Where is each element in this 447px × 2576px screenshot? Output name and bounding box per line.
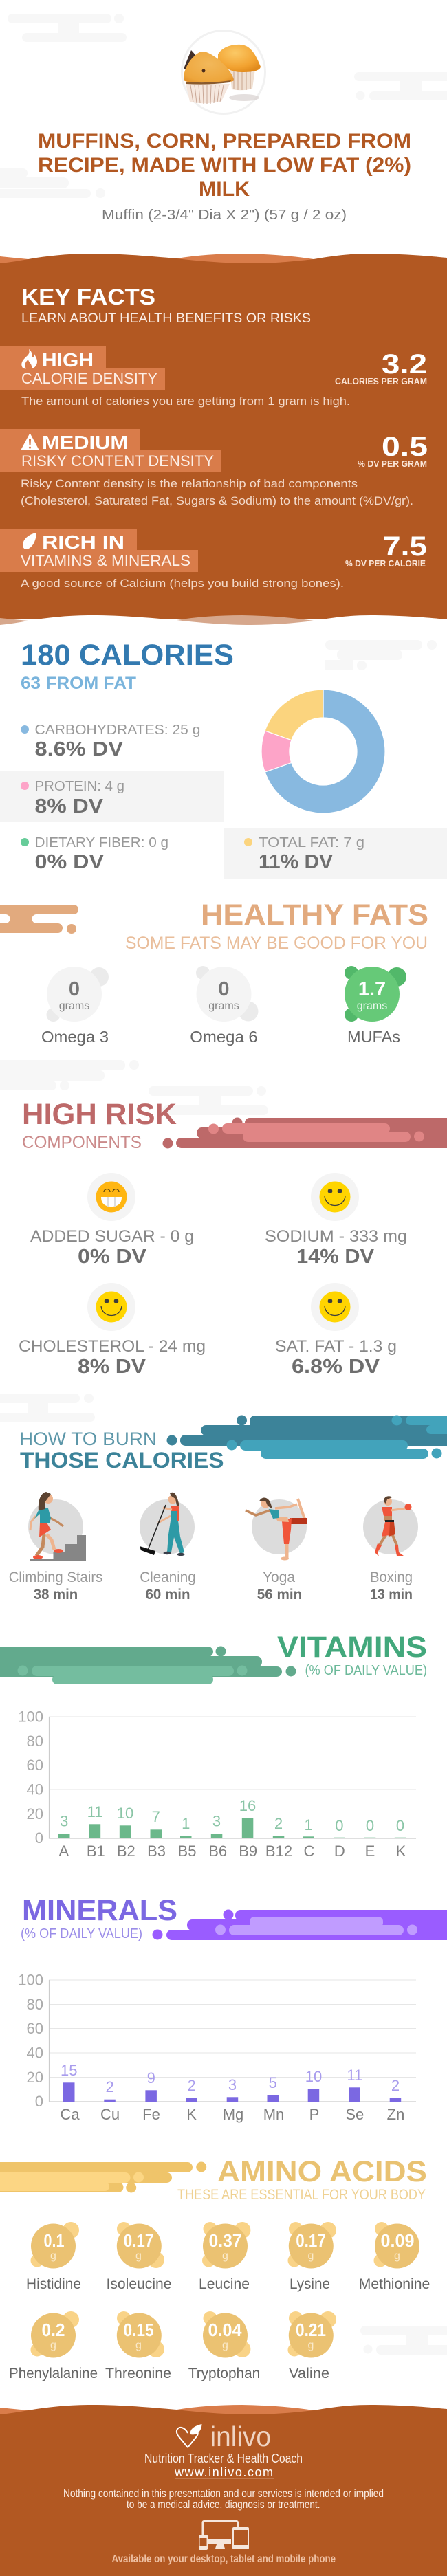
bar chart: minerals percent of daily value: 40 bbox=[27, 2045, 43, 2061]
heading: minerals: (% OF DAILY VALUE) bbox=[21, 1926, 142, 1941]
item: sodium: SODIUM - 333 mg bbox=[265, 1227, 407, 1246]
heading: calories: 180 CALORIES bbox=[21, 639, 234, 672]
fact: calorie density bbox=[0, 346, 427, 408]
bar chart: vitamins percent of daily value: 10 bbox=[117, 1805, 133, 1822]
legend: carbohydrates bbox=[21, 723, 201, 760]
bar chart: minerals percent of daily value: 0 bbox=[35, 2093, 43, 2110]
stat: mufas: 1.7 bbox=[358, 978, 386, 1000]
item: added sugar: ADDED SUGAR - 0 g bbox=[30, 1227, 194, 1246]
item: sodium bbox=[265, 1173, 407, 1268]
icon: muffins photo bbox=[182, 30, 265, 114]
amino acid: leucine: Leucine bbox=[199, 2276, 250, 2292]
bar chart: vitamins percent of daily value: 0 bbox=[366, 1817, 374, 1834]
heading: key facts: LEARN ABOUT HEALTH BENEFITS OR RISKS bbox=[21, 311, 311, 326]
item: sodium: 14% DV bbox=[296, 1246, 375, 1268]
amino acid: phenylalanine: Phenylalanine bbox=[9, 2366, 98, 2381]
icon: smiling face bbox=[87, 1283, 135, 1331]
heading: healthy fats bbox=[125, 899, 428, 953]
amino acid: lysine: g bbox=[308, 2250, 314, 2262]
heading: high risk: HIGH RISK bbox=[22, 1098, 177, 1131]
amino acid: valine: g bbox=[308, 2340, 314, 2351]
legend: dietary fiber: 0% DV bbox=[34, 851, 105, 873]
fact: calorie density: CALORIES PER GRAM bbox=[335, 376, 427, 386]
decorative banner: high risk bbox=[162, 1118, 447, 1148]
panel: how to burn bbox=[9, 1415, 447, 1603]
item: added sugar: 0% DV bbox=[78, 1246, 147, 1268]
stat: omega 6: 0 bbox=[218, 978, 230, 1000]
bar chart: vitamins percent of daily value: A bbox=[59, 1842, 69, 1860]
bar chart: vitamins percent of daily value: 60 bbox=[27, 1757, 43, 1774]
bar chart: minerals percent of daily value: Se bbox=[345, 2106, 364, 2123]
website link: www.inlivo.com bbox=[174, 2465, 273, 2479]
heading: calories: 63 FROM FAT bbox=[21, 674, 136, 693]
fact: risky content density: MEDIUM bbox=[42, 432, 128, 453]
amino acid: histidine: Histidine bbox=[26, 2276, 81, 2292]
availability note: Available on your desktop, tablet and mobile phone bbox=[111, 2553, 336, 2565]
item: cholesterol: 8% DV bbox=[78, 1356, 146, 1378]
stat: omega 3: Omega 3 bbox=[41, 1028, 109, 1046]
activity: climbing stairs: 38 min bbox=[34, 1587, 78, 1603]
amino acid: threonine: g bbox=[135, 2340, 142, 2351]
activity: boxing: Boxing bbox=[370, 1570, 413, 1585]
amino acid: tryptophan: 0.04 bbox=[208, 2320, 242, 2340]
legend: protein bbox=[0, 771, 224, 822]
amino acid: phenylalanine: 0.2 bbox=[41, 2320, 65, 2340]
heading: calories bbox=[21, 639, 234, 693]
fact: calorie density: HIGH bbox=[42, 349, 94, 371]
bar chart: minerals percent of daily value: 2 bbox=[187, 2077, 196, 2094]
chart: macronutrient donut bbox=[261, 690, 385, 813]
amino acid: leucine bbox=[199, 2222, 250, 2292]
bar chart: minerals percent of daily value: 2 bbox=[391, 2077, 400, 2094]
bar chart: vitamins percent of daily value: 3 bbox=[212, 1813, 221, 1830]
amino acid: isoleucine: Isoleucine bbox=[106, 2276, 172, 2292]
amino acid: histidine: g bbox=[50, 2250, 56, 2262]
bar chart: vitamins percent of daily value: 7 bbox=[152, 1808, 160, 1825]
heading: amino acids bbox=[177, 2155, 427, 2203]
item: cholesterol: CHOLESTEROL - 24 mg bbox=[19, 1337, 206, 1356]
bar chart: vitamins percent of daily value: 100 bbox=[18, 1708, 43, 1726]
stat: mufas: MUFAs bbox=[347, 1028, 400, 1046]
bar chart: vitamins percent of daily value: B2 bbox=[117, 1842, 135, 1860]
stat: omega 6 bbox=[190, 966, 259, 1046]
icon: grinning face bbox=[87, 1173, 135, 1221]
heading: high risk bbox=[22, 1098, 177, 1152]
bar chart: vitamins percent of daily value: C bbox=[303, 1842, 314, 1860]
heading: healthy fats: SOME FATS MAY BE GOOD FOR YOU bbox=[125, 934, 428, 953]
amino acid: valine: Valine bbox=[289, 2366, 329, 2381]
decorative banner: amino acids bbox=[0, 2161, 206, 2193]
bar chart: vitamins percent of daily value: 1 bbox=[304, 1816, 313, 1834]
stat: omega 3: grams bbox=[59, 1000, 89, 1012]
panel: high risk components bbox=[19, 1098, 447, 1378]
bar chart: vitamins percent of daily value: 40 bbox=[27, 1781, 43, 1798]
tagline: Nutrition Tracker & Health Coach bbox=[144, 2452, 303, 2465]
item: cholesterol bbox=[19, 1283, 206, 1378]
activity: yoga: Yoga bbox=[263, 1570, 295, 1585]
bar chart: vitamins percent of daily value: B6 bbox=[208, 1842, 227, 1860]
amino acid: methionine bbox=[359, 2222, 430, 2292]
bar chart: minerals percent of daily value: 60 bbox=[27, 2020, 43, 2037]
fact: rich in vitamins and minerals: A good source of Calcium (helps you build strong bones). bbox=[21, 577, 344, 590]
icon: woman sweeping bbox=[140, 1493, 195, 1556]
bar chart: minerals percent of daily value: 10 bbox=[305, 2068, 322, 2085]
title: MUFFINS, CORN, PREPARED FROM bbox=[38, 130, 411, 153]
amino acid: leucine: g bbox=[222, 2250, 228, 2262]
bar chart: vitamins percent of daily value: 80 bbox=[27, 1732, 43, 1750]
bar chart: vitamins percent of daily value: 16 bbox=[239, 1797, 256, 1814]
fact: risky content density: % DV PER GRAM bbox=[358, 459, 427, 469]
fact: rich in vitamins and minerals: 7.5 bbox=[383, 531, 427, 562]
item: saturated fat: SAT. FAT - 1.3 g bbox=[275, 1337, 397, 1356]
legend: dietary fiber bbox=[21, 835, 168, 873]
amino acid: valine: 0.21 bbox=[296, 2320, 326, 2340]
amino acid: isoleucine bbox=[106, 2222, 172, 2292]
amino acid: isoleucine: g bbox=[135, 2250, 142, 2262]
panel: calories bbox=[0, 639, 447, 879]
panel: amino acids bbox=[0, 2155, 430, 2381]
bar chart: minerals percent of daily value: Cu bbox=[100, 2106, 120, 2123]
bar chart: minerals percent of daily value: Ca bbox=[61, 2106, 80, 2123]
decorative banner: vitamins bbox=[0, 1646, 296, 1684]
bar chart: vitamins percent of daily value: 20 bbox=[27, 1805, 43, 1823]
bar chart: minerals percent of daily value: K bbox=[186, 2106, 197, 2123]
amino acid: phenylalanine bbox=[9, 2311, 98, 2381]
panel: footer bbox=[0, 2405, 447, 2576]
bar chart: minerals percent of daily value: 11 bbox=[347, 2067, 362, 2084]
stat: omega 3 bbox=[41, 967, 109, 1046]
panel: vitamins bbox=[0, 1631, 427, 1860]
heading: minerals bbox=[21, 1894, 177, 1941]
bar chart: minerals percent of daily value: 80 bbox=[27, 1996, 43, 2013]
stat: omega 6: grams bbox=[208, 1000, 239, 1012]
heading: key facts: KEY FACTS bbox=[21, 285, 155, 309]
heading: vitamins bbox=[277, 1631, 427, 1678]
amino acid: methionine: 0.09 bbox=[381, 2230, 414, 2251]
bar chart: minerals percent of daily value: 5 bbox=[269, 2074, 277, 2091]
panel: key facts bbox=[0, 254, 447, 639]
fact: risky content density: Risky Content density is the relationship of bad components bbox=[21, 478, 358, 490]
heading: minerals: MINERALS bbox=[22, 1894, 177, 1927]
activity: cleaning: Cleaning bbox=[140, 1570, 196, 1585]
icon: boxer bbox=[363, 1496, 418, 1556]
legend: protein: 8% DV bbox=[34, 795, 104, 817]
activity: climbing stairs bbox=[9, 1492, 102, 1603]
fact: risky content density: 0.5 bbox=[382, 432, 428, 462]
bar chart: minerals percent of daily value bbox=[18, 1972, 416, 2123]
amino acid: tryptophan: Tryptophan bbox=[188, 2366, 260, 2381]
amino acid: histidine: 0.1 bbox=[44, 2230, 65, 2251]
bar chart: minerals percent of daily value: 9 bbox=[147, 2069, 155, 2087]
icon: flame bbox=[21, 349, 37, 368]
amino acid: lysine: 0.17 bbox=[296, 2230, 326, 2251]
activity: cleaning bbox=[140, 1493, 196, 1603]
legend: carbohydrates: 8.6% DV bbox=[34, 738, 124, 760]
fact: risky content density bbox=[0, 429, 428, 507]
icon: woman in yoga pose bbox=[246, 1497, 307, 1561]
item: added sugar bbox=[30, 1173, 194, 1268]
bar chart: vitamins percent of daily value: 0 bbox=[396, 1817, 404, 1834]
fact: calorie density: CALORIE DENSITY bbox=[21, 370, 157, 387]
panel: healthy fats bbox=[0, 899, 428, 1046]
amino acid: tryptophan bbox=[188, 2311, 260, 2381]
legend: carbohydrates: CARBOHYDRATES: 25 g bbox=[34, 723, 201, 738]
bar chart: vitamins percent of daily value: D bbox=[334, 1842, 345, 1860]
stat: mufas bbox=[345, 966, 406, 1046]
legend: dietary fiber: DIETARY FIBER: 0 g bbox=[34, 835, 168, 850]
bar chart: vitamins percent of daily value: B3 bbox=[147, 1842, 166, 1860]
bar chart: vitamins percent of daily value bbox=[18, 1708, 416, 1860]
heading: how to burn: THOSE CALORIES bbox=[20, 1448, 224, 1473]
amino acid: phenylalanine: g bbox=[50, 2340, 56, 2351]
disclaimer: to be a medical advice, diagnosis or treatment. bbox=[127, 2499, 320, 2511]
bar chart: vitamins percent of daily value: 11 bbox=[87, 1803, 102, 1820]
activity: yoga: 56 min bbox=[257, 1587, 302, 1603]
bar chart: vitamins percent of daily value: K bbox=[396, 1842, 406, 1860]
stat: mufas: grams bbox=[357, 1000, 387, 1012]
bar chart: minerals percent of daily value: P bbox=[309, 2106, 319, 2123]
bar chart: vitamins percent of daily value: B1 bbox=[87, 1842, 105, 1860]
title: MILK bbox=[199, 178, 250, 201]
stat: omega 6: Omega 6 bbox=[190, 1028, 258, 1046]
bar chart: minerals percent of daily value: Mg bbox=[223, 2106, 243, 2123]
decorative banner: burn bbox=[166, 1415, 447, 1459]
item: saturated fat: 6.8% DV bbox=[292, 1356, 380, 1378]
heading: vitamins: (% OF DAILY VALUE) bbox=[305, 1663, 427, 1678]
fact: calorie density: The amount of calories you are getting from 1 gram is high. bbox=[21, 395, 350, 408]
fact: calorie density: 3.2 bbox=[382, 349, 427, 379]
icon: inlivo heart logo bbox=[177, 2424, 202, 2447]
amino acid: isoleucine: 0.17 bbox=[124, 2230, 153, 2251]
bar chart: vitamins percent of daily value: B9 bbox=[239, 1842, 257, 1860]
bar chart: vitamins percent of daily value: B12 bbox=[265, 1842, 292, 1860]
amino acid: methionine: g bbox=[394, 2250, 400, 2262]
bar chart: minerals percent of daily value: 15 bbox=[61, 2062, 78, 2079]
amino acid: leucine: 0.37 bbox=[209, 2230, 242, 2251]
logo wordmark: inlivo bbox=[210, 2421, 271, 2452]
bar chart: vitamins percent of daily value: E bbox=[365, 1842, 375, 1860]
bar chart: minerals percent of daily value: 3 bbox=[228, 2076, 237, 2093]
amino acid: threonine bbox=[105, 2311, 171, 2381]
decorative banner: healthy fats bbox=[0, 905, 78, 934]
fact: risky content density: RISKY CONTENT DENSITY bbox=[21, 452, 214, 470]
disclaimer bbox=[63, 2488, 384, 2511]
heading: healthy fats: HEALTHY FATS bbox=[201, 899, 428, 932]
fact: risky content density: (Cholesterol, Saturated Fat, Sugars & Sodium) to the amount (%DV/gr). bbox=[21, 495, 413, 507]
bar chart: minerals percent of daily value: 100 bbox=[18, 1972, 43, 1988]
serving size: Muffin (2-3/4" Dia X 2") (57 g / 2 oz) bbox=[102, 208, 347, 223]
icon: desktop, tablet and phone bbox=[199, 2520, 249, 2550]
activity: boxing bbox=[363, 1496, 418, 1603]
fact: rich in vitamins and minerals: VITAMINS & MINERALS bbox=[21, 552, 190, 569]
stat: omega 3: 0 bbox=[69, 978, 80, 1000]
disclaimer: Nothing contained in this presentation and our services is intended or implied bbox=[63, 2488, 384, 2500]
fact: rich in vitamins and minerals: RICH IN bbox=[42, 531, 124, 553]
heading: amino acids: AMINO ACIDS bbox=[217, 2155, 427, 2188]
bar chart: vitamins percent of daily value: 3 bbox=[60, 1813, 68, 1830]
amino acid: threonine: 0.15 bbox=[124, 2320, 154, 2340]
amino acid: methionine: Methionine bbox=[359, 2276, 430, 2292]
legend: total fat: 11% DV bbox=[259, 851, 334, 873]
panel: minerals bbox=[18, 1894, 447, 2123]
amino acid: tryptophan: g bbox=[222, 2340, 228, 2351]
bar chart: vitamins percent of daily value: 0 bbox=[335, 1817, 344, 1834]
amino acid: lysine: Lysine bbox=[290, 2276, 330, 2292]
bar chart: vitamins percent of daily value: 1 bbox=[182, 1815, 190, 1832]
amino acid: lysine bbox=[287, 2222, 336, 2292]
item: saturated fat bbox=[275, 1283, 397, 1378]
title bbox=[38, 130, 411, 201]
heading: key facts bbox=[21, 285, 311, 326]
heading: how to burn: HOW TO BURN bbox=[19, 1429, 157, 1449]
legend: total fat bbox=[224, 828, 447, 879]
amino acid: valine bbox=[287, 2311, 336, 2381]
heading: vitamins: VITAMINS bbox=[277, 1631, 427, 1664]
icon: leaf bbox=[23, 533, 36, 549]
activity: boxing: 13 min bbox=[370, 1587, 413, 1603]
legend: protein: PROTEIN: 4 g bbox=[34, 779, 124, 794]
bar chart: minerals percent of daily value: Fe bbox=[142, 2106, 160, 2123]
amino acid: threonine: Threonine bbox=[105, 2366, 171, 2381]
bar chart: vitamins percent of daily value: B5 bbox=[178, 1842, 196, 1860]
fact: rich in vitamins and minerals: % DV PER CALORIE bbox=[345, 558, 426, 569]
heading: high risk: COMPONENTS bbox=[22, 1133, 142, 1152]
amino acid: histidine bbox=[26, 2222, 81, 2292]
fact: rich in vitamins and minerals bbox=[0, 529, 427, 590]
bar chart: minerals percent of daily value: Mn bbox=[263, 2106, 284, 2123]
title: RECIPE, MADE WITH LOW FAT (2%) bbox=[38, 154, 411, 177]
icon: smiling face bbox=[311, 1283, 359, 1331]
icon: woman climbing stairs bbox=[28, 1492, 86, 1561]
activity: climbing stairs: Climbing Stairs bbox=[9, 1570, 102, 1585]
bar chart: minerals percent of daily value: 2 bbox=[105, 2078, 114, 2095]
legend: total fat: TOTAL FAT: 7 g bbox=[259, 835, 364, 850]
decorative banner: minerals bbox=[153, 1910, 447, 1940]
activity: yoga bbox=[246, 1497, 307, 1603]
icon: smiling face bbox=[311, 1173, 359, 1221]
icon: warning triangle bbox=[21, 433, 39, 450]
heading: how to burn bbox=[19, 1429, 224, 1473]
activity: cleaning: 60 min bbox=[146, 1587, 190, 1603]
bar chart: vitamins percent of daily value: 0 bbox=[35, 1829, 43, 1847]
bar chart: minerals percent of daily value: 20 bbox=[27, 2069, 43, 2086]
bar chart: vitamins percent of daily value: 2 bbox=[274, 1815, 283, 1832]
bar chart: minerals percent of daily value: Zn bbox=[387, 2106, 404, 2123]
